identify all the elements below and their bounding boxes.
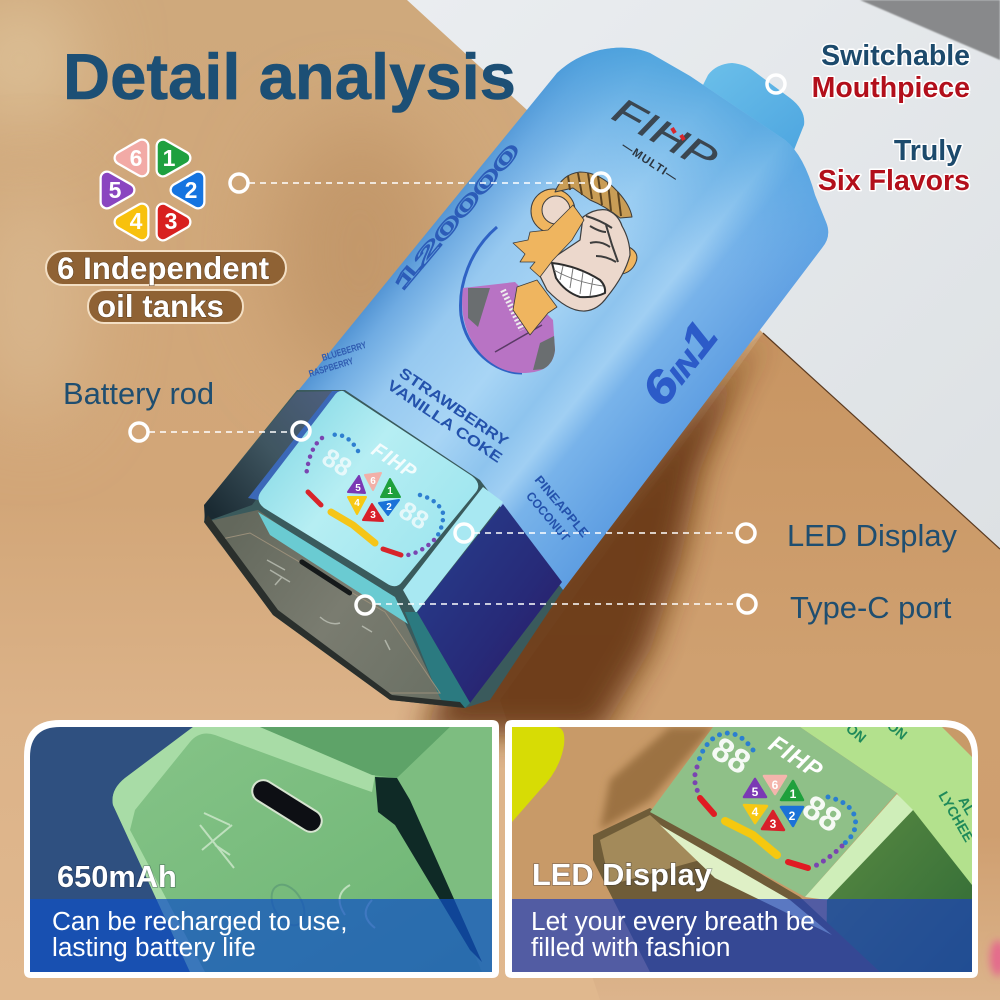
screen: digit readouts: 88 — [317, 442, 357, 483]
card 1: USB-C port — [251, 779, 323, 833]
card 2: dot arcs — [695, 733, 856, 866]
card 2: body text — [531, 906, 815, 962]
label: truly six flavors: Truly — [894, 135, 962, 167]
background: dark grey corner — [860, 0, 1000, 60]
icon: six flavor hexagon: 5 — [109, 177, 122, 203]
device body — [297, 48, 828, 590]
screen: six flavor wheel: 1 — [387, 486, 393, 497]
screen: six flavor wheel: 4 — [354, 498, 360, 509]
label: switchable mouthpiece: Mouthpiece — [812, 72, 970, 104]
label: Battery rod: Battery rod — [63, 376, 214, 411]
ape brow and eye — [586, 216, 618, 262]
card 2: flavor wheel: 2 — [789, 809, 796, 823]
card 2: digit readouts — [712, 738, 841, 831]
card 2: body text: Let your every breath be — [531, 906, 815, 936]
card 1: embossed recycling mark — [200, 813, 375, 931]
icon: six flavor hexagon: 1 — [163, 145, 176, 171]
card 2: flavor wheel: 3 — [770, 817, 777, 831]
ape teeth — [552, 263, 605, 297]
ape crescent outline — [461, 227, 522, 373]
card 2: body lettering: ON — [843, 720, 869, 746]
ape neck — [513, 280, 557, 335]
pill: oil tanks: oil tanks — [97, 289, 224, 324]
card 2: green screen — [650, 727, 897, 897]
card 1: body text: lasting battery life — [52, 932, 256, 962]
panel: 650mAh card — [24, 720, 499, 978]
LED screen — [258, 391, 478, 586]
flavor text: strawberry: STRAWBERRY — [396, 365, 511, 450]
background: soft tonal blotches — [0, 0, 450, 420]
logo: MULTI tag: —MULTI— — [619, 140, 680, 185]
card 2: digit readouts: 88 — [705, 730, 757, 782]
card 2: dark green panel — [826, 810, 972, 972]
card 2: lime device body — [800, 727, 972, 900]
label: truly six flavors — [818, 135, 970, 197]
ape hair — [513, 205, 584, 277]
flavor text: pineapple: COCONUT — [523, 489, 573, 544]
callout: type-C leader — [356, 595, 756, 614]
mouthpiece — [698, 63, 804, 150]
lower metallic silhouette — [204, 390, 563, 708]
screen: digit readouts — [317, 442, 434, 536]
bottom face: embossed marks — [267, 560, 390, 650]
flavor text: pineapple — [519, 473, 591, 551]
card 1: body text: Can be recharged to use, — [52, 906, 348, 936]
ape beanie — [555, 172, 632, 218]
card 2: caption band — [512, 899, 972, 972]
callout: mouthpiece marker — [767, 75, 785, 93]
card 2: red and yellow bars — [700, 798, 808, 868]
background: device shadow — [420, 335, 763, 735]
screen: six flavor wheel: 5 — [355, 483, 361, 494]
screen: digit readouts: 88 — [394, 495, 434, 536]
panel: LED Display card — [505, 717, 979, 978]
card 2: pale side strip — [805, 794, 913, 900]
label: Type-C port: Type-C port — [790, 590, 952, 625]
flavor text: blueberry: BLUEBERRY — [321, 340, 368, 364]
card 2: body lettering: ON — [884, 717, 910, 743]
card 2: body lettering: LYCHEE — [935, 788, 977, 845]
card 2: heading: LED Display — [532, 857, 712, 892]
screen: six flavor wheel — [348, 473, 400, 521]
callout: battery rod leader — [130, 422, 310, 441]
blue edge of left band — [248, 391, 345, 500]
ape ear — [531, 189, 575, 233]
screen: six flavor wheel: 6 — [370, 476, 376, 487]
logo on body — [606, 89, 724, 185]
label: switchable mouthpiece: Switchable — [821, 40, 970, 72]
ape mascot illustration — [455, 172, 637, 380]
flavor text: pineapple: PINEAPPLE — [532, 473, 591, 540]
ape vest — [462, 282, 555, 373]
icon: six flavor hexagon: 2 — [185, 177, 197, 203]
background: white paper sheet — [407, 0, 1000, 549]
card 2: FIHP logo: FIHP — [764, 730, 828, 785]
screen: dot arcs — [306, 435, 443, 555]
card 2: flavor wheel: 4 — [752, 805, 759, 819]
card 1: dark seam — [375, 777, 482, 962]
logo on body: FIHP — [606, 89, 724, 179]
label: LED Display: LED Display — [787, 518, 958, 553]
pill: 6 Independent: 6 Independent — [57, 251, 270, 286]
icon: six flavor hexagon — [107, 145, 198, 234]
puff count: 120000 — [391, 141, 524, 294]
card 2: body lettering: AL — [955, 794, 979, 818]
bottom face: USB port — [298, 558, 353, 596]
screen: logo: FIHP — [367, 439, 421, 484]
card 1: heading: 650mAh — [57, 859, 177, 894]
screen: six flavor wheel: 2 — [386, 502, 392, 513]
flavor text: blueberry — [308, 340, 368, 380]
screen: six flavor wheel: 3 — [370, 510, 376, 521]
card 2: flavor wheel: 1 — [790, 787, 797, 801]
flavor text: blueberry: RASPBERRY — [308, 356, 355, 380]
card 2: flavor wheel — [744, 776, 803, 831]
ape far ear — [622, 246, 637, 274]
card 2: body lettering — [847, 727, 972, 843]
label: truly six flavors: Six Flavors — [818, 165, 970, 197]
title: Detail analysis — [63, 40, 516, 113]
ape face — [538, 210, 630, 311]
flavor text: strawberry: VANILLA COKE — [384, 377, 505, 467]
bottom face — [205, 510, 442, 702]
label: switchable mouthpiece — [812, 40, 970, 104]
flavor text: strawberry — [384, 363, 515, 467]
screen: red and yellow bars — [308, 492, 401, 555]
icon: six flavor hexagon: 3 — [165, 208, 177, 234]
cyan side strip — [403, 487, 503, 613]
callout: LED display leader — [455, 524, 755, 542]
callout: six tanks leader — [230, 173, 610, 192]
icon: six flavor hexagon: 6 — [130, 145, 142, 171]
logo: red accent — [672, 128, 684, 140]
product: vape device — [204, 48, 828, 708]
card 1: green device face — [112, 727, 492, 972]
indigo side panel — [417, 504, 562, 703]
card 1: body text — [52, 906, 348, 962]
card 2: metallic base — [593, 808, 880, 972]
card 2: yellow mouthpiece blur — [512, 727, 564, 822]
card 2: flavor wheel: 5 — [752, 785, 759, 799]
teal base corner — [405, 612, 470, 708]
card 2: body text: filled with fashion — [531, 932, 730, 962]
card 1: pale rim — [112, 727, 375, 972]
card 2: flavor wheel: 6 — [772, 778, 779, 792]
card 2: shaded brown flank — [600, 727, 713, 830]
pink blur at right edge — [990, 940, 1000, 976]
dark metallic left band — [204, 391, 340, 522]
card 1: blue caption band — [30, 899, 492, 972]
card 2: digit readouts: 88 — [796, 788, 848, 840]
icon: six flavor hexagon: 4 — [130, 208, 143, 234]
background: brown panel lower right — [500, 333, 1000, 1000]
6 in 1 badge: 6IN1 — [632, 312, 728, 415]
